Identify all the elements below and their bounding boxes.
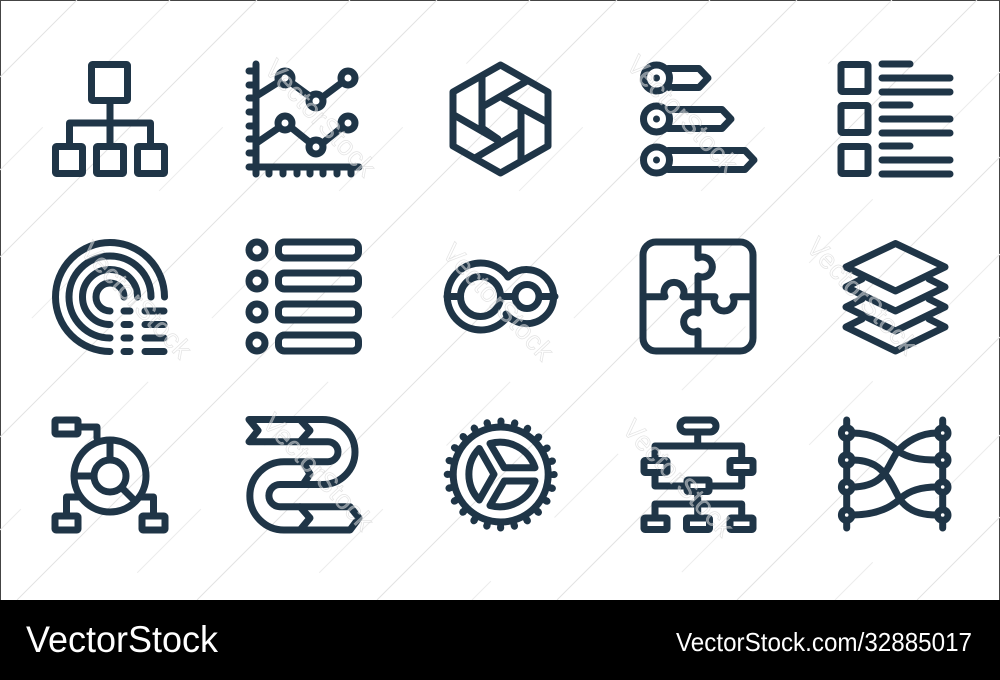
icon: flowchart <box>644 420 753 530</box>
watermark: VectorStock text: VectorStock <box>257 408 380 537</box>
icon: pin tags <box>644 65 754 173</box>
icon: puzzle <box>643 242 753 351</box>
footer band <box>0 600 1000 680</box>
icon: infinity rings <box>447 263 555 330</box>
watermark: VectorStock text: VectorStock <box>617 414 740 543</box>
icon: crossing network <box>841 420 948 528</box>
watermark: VectorStock text <box>75 50 924 543</box>
watermark: VectorStock text: VectorStock <box>801 232 924 361</box>
icon: hexagon aperture <box>453 65 548 173</box>
watermark: VectorStock text: VectorStock <box>75 236 198 365</box>
icon: bullet list <box>249 242 358 351</box>
icon: layers <box>846 244 945 351</box>
watermark: VectorStock text: VectorStock <box>259 54 382 183</box>
footer brand: VectorStock <box>26 619 218 660</box>
watermark: VectorStock text: VectorStock <box>437 238 560 367</box>
icon: checklist <box>841 64 950 174</box>
icon: gear with three blades <box>447 421 554 528</box>
icon: concentric arcs <box>55 242 164 352</box>
footer image id: VectorStock.com/32885017 <box>676 627 972 657</box>
icon: hierarchy squares <box>56 64 164 174</box>
icon: winding ribbon <box>249 420 359 530</box>
watermark: VectorStock text: VectorStock <box>621 50 744 179</box>
icon: circular diagram with boxes <box>55 420 165 530</box>
icon: line chart <box>249 64 359 174</box>
